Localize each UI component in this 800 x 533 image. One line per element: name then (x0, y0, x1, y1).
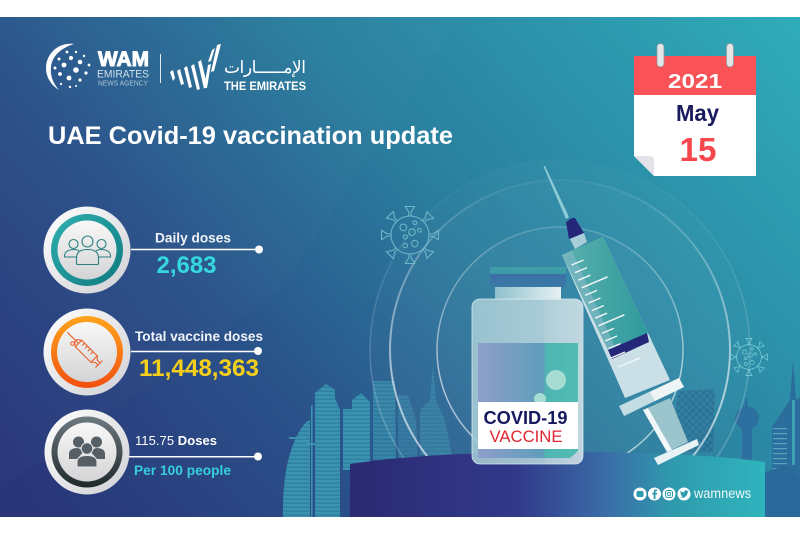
decorative diagonal light band (0, 17, 460, 490)
barrel (562, 237, 670, 398)
value: 11,448,363 (139, 355, 259, 382)
icon: people outline (64, 236, 111, 264)
medallion: teal (44, 206, 130, 294)
NEWS AGENCY: NEWS AGENCY (98, 78, 148, 88)
title: UAE Covid-19 vaccination update (48, 122, 453, 150)
right skyline (672, 360, 800, 517)
barrel fluid (562, 237, 648, 350)
label text: COVID-19: COVID-19 (484, 407, 568, 428)
WAM globe (46, 44, 90, 90)
bubbles (534, 370, 566, 405)
vial cap (490, 267, 566, 287)
hub (566, 218, 584, 239)
label: Total vaccine doses (135, 328, 263, 344)
vial neck (495, 287, 561, 300)
vial liquid (478, 343, 578, 458)
label: 115.75 Doses (135, 433, 217, 448)
THE EMIRATES: THE EMIRATES (224, 79, 306, 93)
calendar (634, 44, 756, 176)
month: May (676, 100, 719, 126)
emblem stripes (170, 44, 221, 90)
logo divider (160, 54, 161, 83)
plunger band (608, 333, 649, 359)
calendar rings (657, 44, 734, 67)
flange (619, 378, 684, 416)
page fold (634, 156, 654, 176)
mesh building (672, 389, 715, 452)
logo: WAM (46, 44, 149, 90)
vial label (478, 402, 578, 449)
plunger (643, 398, 688, 452)
label: Daily doses (155, 230, 231, 246)
stat: total vaccine doses (44, 308, 263, 396)
social handle (634, 486, 751, 501)
icon: people solid (69, 436, 105, 467)
medallion: grey (44, 410, 130, 494)
day: 15 (680, 131, 716, 168)
syringe (544, 166, 699, 465)
tick marks (572, 260, 640, 367)
tower (735, 398, 759, 460)
social icons (634, 488, 690, 500)
left skyline (283, 365, 452, 517)
connector line (131, 350, 258, 352)
medallion: orange (44, 308, 130, 396)
connector line (131, 248, 259, 250)
Arabic wordmark: الإمــــــارات (224, 58, 306, 78)
icon: syringe outline (64, 329, 103, 368)
icon: virus top (382, 206, 438, 264)
stat: daily doses (44, 206, 263, 294)
platform (350, 452, 765, 517)
connector line (129, 456, 258, 458)
calendar sheet (634, 95, 756, 176)
year: 2021 (668, 71, 722, 93)
plunger end (654, 439, 699, 465)
skyscraper (765, 360, 800, 517)
icon dot (71, 342, 74, 345)
needle (544, 166, 569, 219)
vial glass (472, 299, 583, 464)
label text: VACCINE: VACCINE (490, 428, 562, 446)
handle text: wamnews (693, 486, 751, 501)
calendar header (634, 56, 756, 95)
sub-label: Per 100 people (134, 463, 231, 478)
hub neck (570, 233, 587, 249)
EMIRATES: EMIRATES (97, 68, 149, 80)
WAM wordmark: WAM (98, 48, 149, 71)
value: 2,683 (156, 252, 216, 279)
protective bubble rings (369, 172, 751, 458)
stat: doses per 100 people (44, 410, 262, 494)
icon: virus right (730, 338, 768, 376)
logo: The Emirates (170, 44, 306, 93)
vaccine vial (472, 267, 583, 464)
